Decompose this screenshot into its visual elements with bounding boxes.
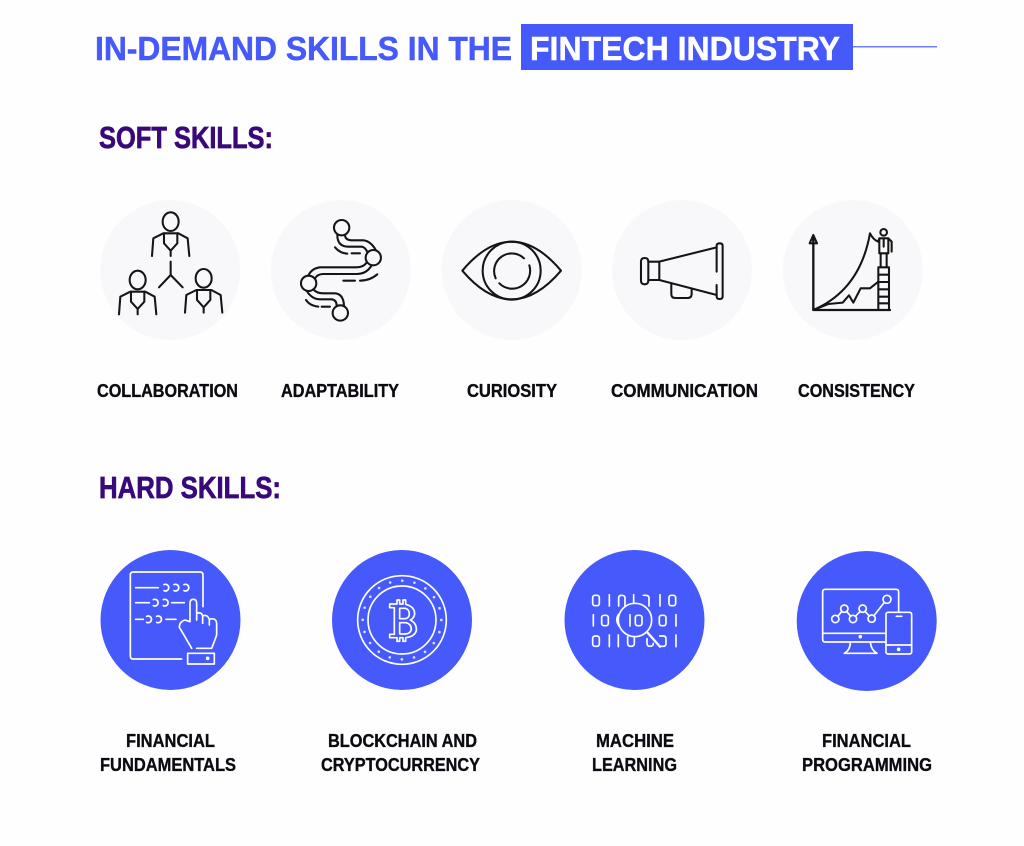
label: financial fundamentals: FUNDAMENTALS	[100, 755, 236, 775]
title: highlighted part: FINTECH INDUSTRY	[530, 30, 840, 67]
label: financial programming	[802, 731, 932, 775]
soft skill: consistency	[783, 200, 923, 401]
label: financial fundamentals: FINANCIAL	[126, 731, 215, 751]
collaboration background circle	[100, 200, 240, 340]
hard skill: machine learning	[564, 550, 704, 775]
label: adaptability: ADAPTABILITY	[281, 381, 399, 401]
icon: growth chart with person on ladder	[810, 229, 892, 310]
financial fundamentals blue circle	[100, 550, 240, 690]
label: collaboration: COLLABORATION	[97, 381, 238, 401]
machine learning blue circle	[564, 550, 704, 690]
icon: hand pointing at document	[130, 572, 217, 664]
label: machine learning: MACHINE	[596, 731, 674, 751]
icon: eye	[462, 242, 561, 300]
curiosity background circle	[442, 200, 582, 340]
soft skill: collaboration	[97, 200, 240, 401]
heading: soft skills: SOFT SKILLS:	[99, 120, 273, 155]
label: blockchain and cryptocurrency	[321, 731, 480, 775]
label: financial programming: FINANCIAL	[822, 731, 911, 751]
label: machine learning	[592, 731, 677, 775]
title rule	[853, 46, 937, 48]
hard skill: financial programming	[797, 551, 937, 775]
label: financial fundamentals	[100, 731, 236, 775]
icon: monitor and phone with chart	[823, 589, 912, 654]
communication background circle	[612, 200, 752, 340]
icon: binary code with magnifier	[593, 595, 676, 647]
title: first part: IN-DEMAND SKILLS IN THE	[95, 30, 512, 67]
icon: winding path	[301, 220, 381, 321]
adaptability background circle	[271, 200, 411, 340]
heading: hard skills: HARD SKILLS:	[99, 470, 281, 505]
blockchain blue circle	[332, 550, 472, 690]
label: financial programming: PROGRAMMING	[802, 755, 932, 775]
soft skill: adaptability	[271, 200, 411, 401]
soft skill: communication	[611, 200, 758, 401]
hard skill: blockchain and cryptocurrency	[321, 550, 480, 775]
icon: three people	[119, 212, 222, 314]
consistency background circle	[783, 200, 923, 340]
hard skill: financial fundamentals	[100, 550, 240, 775]
financial programming blue circle	[797, 551, 937, 691]
label: curiosity: CURIOSITY	[467, 381, 557, 401]
icon: megaphone	[641, 243, 723, 299]
label: consistency: CONSISTENCY	[798, 381, 915, 401]
label: blockchain and cryptocurrency: CRYPTOCURRENCY	[321, 755, 480, 775]
label: communication: COMMUNICATION	[611, 381, 758, 401]
label: machine learning: LEARNING	[592, 755, 677, 775]
title	[95, 24, 937, 70]
title highlight box	[521, 24, 853, 70]
label: blockchain and cryptocurrency: BLOCKCHAIN AND	[328, 731, 477, 751]
icon: bitcoin coin	[358, 576, 446, 664]
soft skill: curiosity	[442, 200, 582, 401]
